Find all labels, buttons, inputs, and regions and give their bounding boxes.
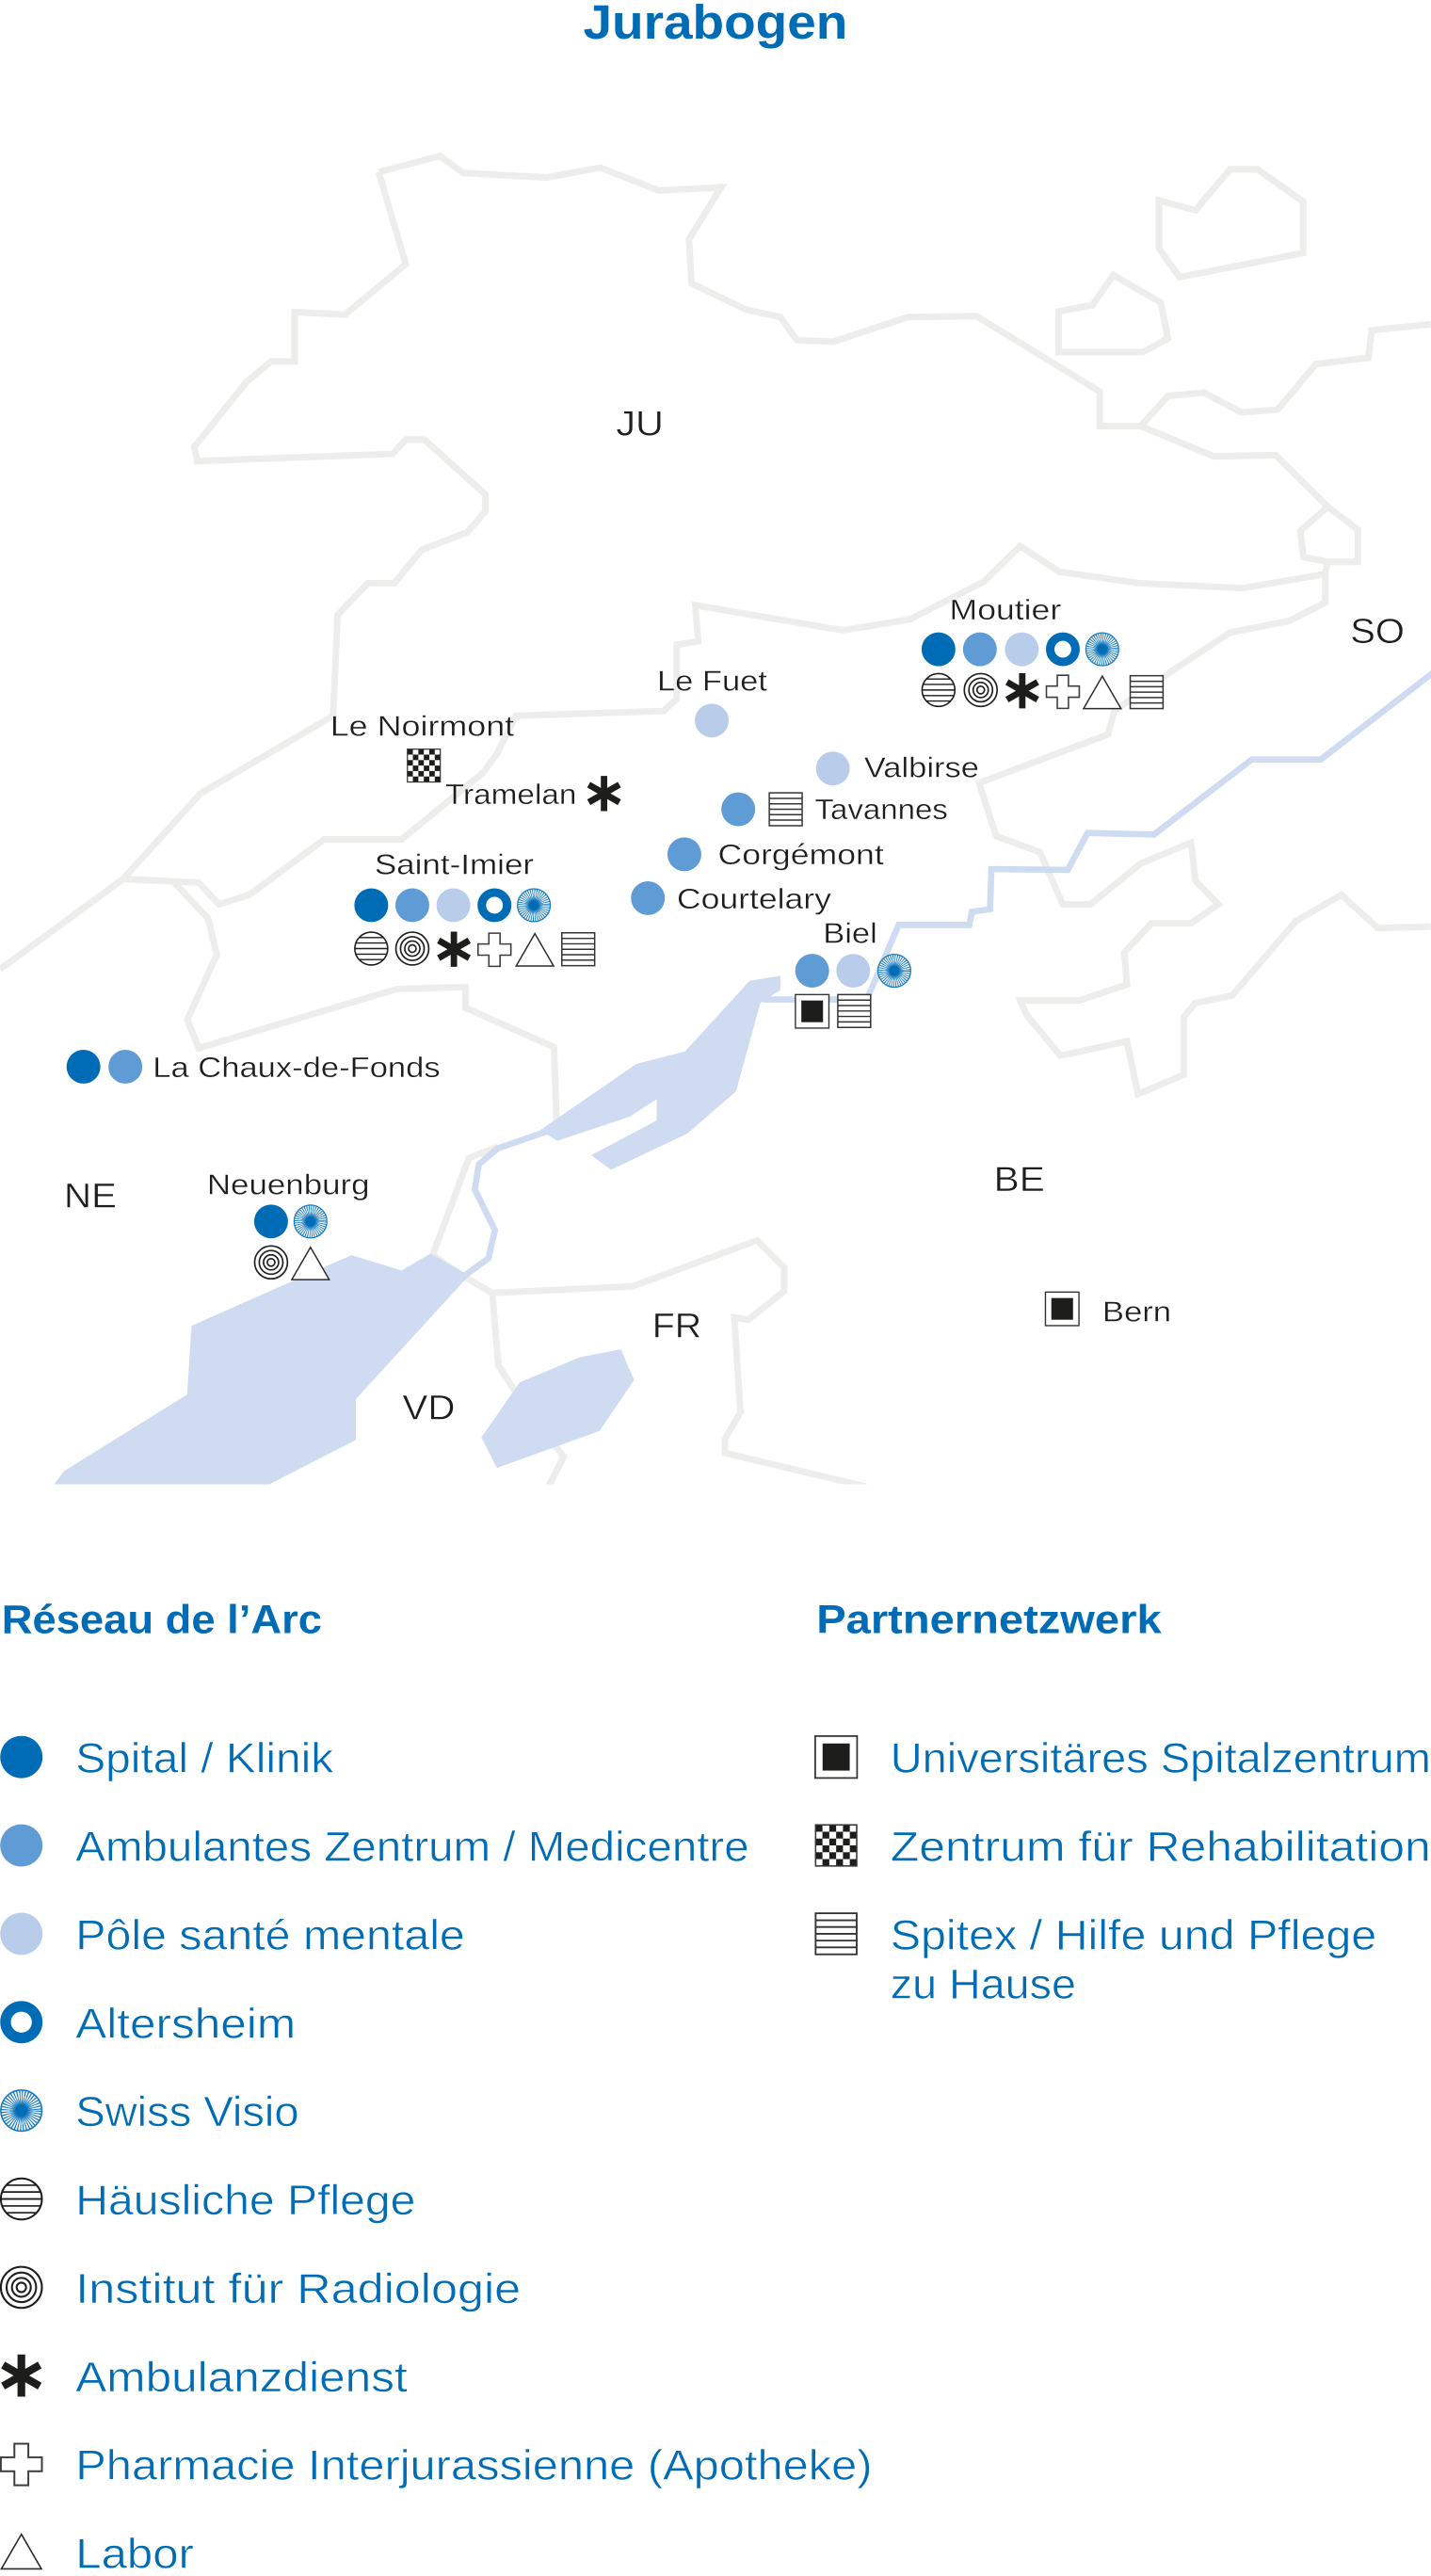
site: Tramelan (445, 776, 619, 811)
legend row: Zentrum für Rehabilitation: Zentrum für Rehabilitation (891, 1825, 1431, 1871)
label: Moutier: Moutier (950, 593, 1061, 626)
label: Neuenburg: Neuenburg (207, 1168, 370, 1201)
legend row: Ambulanzdienst: Ambulanzdienst (75, 2355, 408, 2401)
icon row: Moutier services (922, 633, 1163, 709)
label: Biel: Biel (823, 917, 877, 950)
site: Saint-Imier (354, 847, 595, 967)
site: Bern (1045, 1292, 1171, 1328)
heading: Réseau de l'Arc: Réseau de l’Arc (2, 1597, 322, 1642)
site: Courtelary (631, 881, 832, 915)
icon row: Biel services (796, 954, 910, 1028)
label: Le Noirmont: Le Noirmont (330, 710, 515, 743)
site: Neuenburg (207, 1168, 370, 1280)
canton borders (0, 156, 1431, 1487)
legend row: Spitex / Hilfe und Pflege zu Hause: zu Hause (891, 1961, 1076, 2007)
label: Tavannes: Tavannes (814, 793, 948, 826)
label: Tramelan: Tramelan (445, 778, 576, 811)
legend row: Swiss Visio: Swiss Visio (75, 2089, 299, 2135)
rivers (463, 672, 1431, 1277)
label: Corgémont: Corgémont (718, 838, 884, 871)
canton label: BE: BE (994, 1159, 1045, 1199)
legend: Réseau de l'Arc (0, 1597, 873, 2576)
map: cantonal borders, lakes and sites (0, 156, 1431, 1487)
icon: Universitäres Spitalzentrum (1045, 1292, 1079, 1326)
legend row: Häusliche Pflege: Häusliche Pflege (75, 2178, 415, 2224)
site: Corgémont (667, 837, 884, 871)
icon: rehabilitation (408, 749, 441, 782)
legend row: Altersheim (6, 2001, 296, 2047)
icon: Ambulantes Zentrum (721, 793, 755, 827)
legend row: Pôle santé mentale: Pôle santé mentale (75, 1912, 465, 1958)
lake: Bielersee (539, 975, 780, 1169)
icon row: Saint-Imier services (354, 888, 595, 967)
label: Saint-Imier: Saint-Imier (375, 847, 534, 880)
label: La Chaux-de-Fonds: La Chaux-de-Fonds (153, 1051, 441, 1084)
legend row: Labor (1, 2532, 194, 2576)
heading: Partnernetzwerk: Partnernetzwerk (816, 1597, 1162, 1642)
site: Le Fuet (657, 665, 767, 737)
legend row: Universitäres Spitalzentrum: Universitäres Spitalzentrum (891, 1736, 1431, 1782)
site: Tavannes (721, 793, 948, 827)
site: Le Noirmont (330, 710, 515, 782)
icon: Ambulantes Zentrum (631, 881, 665, 915)
legend row: Spitex / Hilfe und Pflege zu Hause: Spitex / Hilfe und Pflege (891, 1912, 1376, 1958)
canton label: JU: JU (616, 403, 664, 443)
icon: Spitex (769, 793, 802, 826)
label: Bern: Bern (1102, 1295, 1171, 1328)
legend row: Pharmacie Interjurassienne (Apotheke): Pharmacie Interjurassienne (Apotheke) (75, 2443, 873, 2489)
site: Moutier (922, 593, 1163, 709)
legend row: Spitex / Hilfe und Pflege zu Hause (815, 1912, 1376, 2007)
legend row: Altersheim: Altersheim (75, 2001, 296, 2047)
legend row: Spital / Klinik: Spital / Klinik (75, 1736, 334, 1782)
site: Valbirse (816, 750, 979, 785)
icon: Ambulantes Zentrum (667, 837, 701, 871)
label: Valbirse: Valbirse (864, 750, 979, 783)
canton label: VD: VD (403, 1388, 455, 1427)
icon: Pôle santé mentale (816, 751, 850, 785)
lake: Neuenburgersee (55, 1253, 469, 1485)
icon: Spital (67, 1050, 101, 1084)
site: Biel (796, 917, 910, 1028)
legend: Partnernetzwerk (815, 1597, 1431, 2007)
canton label: SO: SO (1350, 611, 1405, 651)
canton label: NE: NE (64, 1176, 117, 1216)
site: La Chaux-de-Fonds (67, 1050, 441, 1084)
legend row: Institut für Radiologie: Institut für Radiologie (75, 2266, 521, 2312)
icon: Pôle santé mentale (695, 703, 729, 737)
icon row: Neuenburg services (254, 1204, 330, 1280)
map base: borders, river and lakes (0, 156, 1431, 1487)
legend row: Ambulantes Zentrum / Medicentre: Ambulantes Zentrum / Medicentre (75, 1825, 749, 1871)
canton label: FR: FR (652, 1305, 701, 1344)
icon: Ambulanzdienst (588, 776, 619, 811)
lake: Murtensee (481, 1349, 635, 1468)
label: Le Fuet: Le Fuet (657, 665, 767, 698)
icon: Ambulantes Zentrum (108, 1050, 142, 1084)
label: Courtelary: Courtelary (677, 882, 832, 915)
